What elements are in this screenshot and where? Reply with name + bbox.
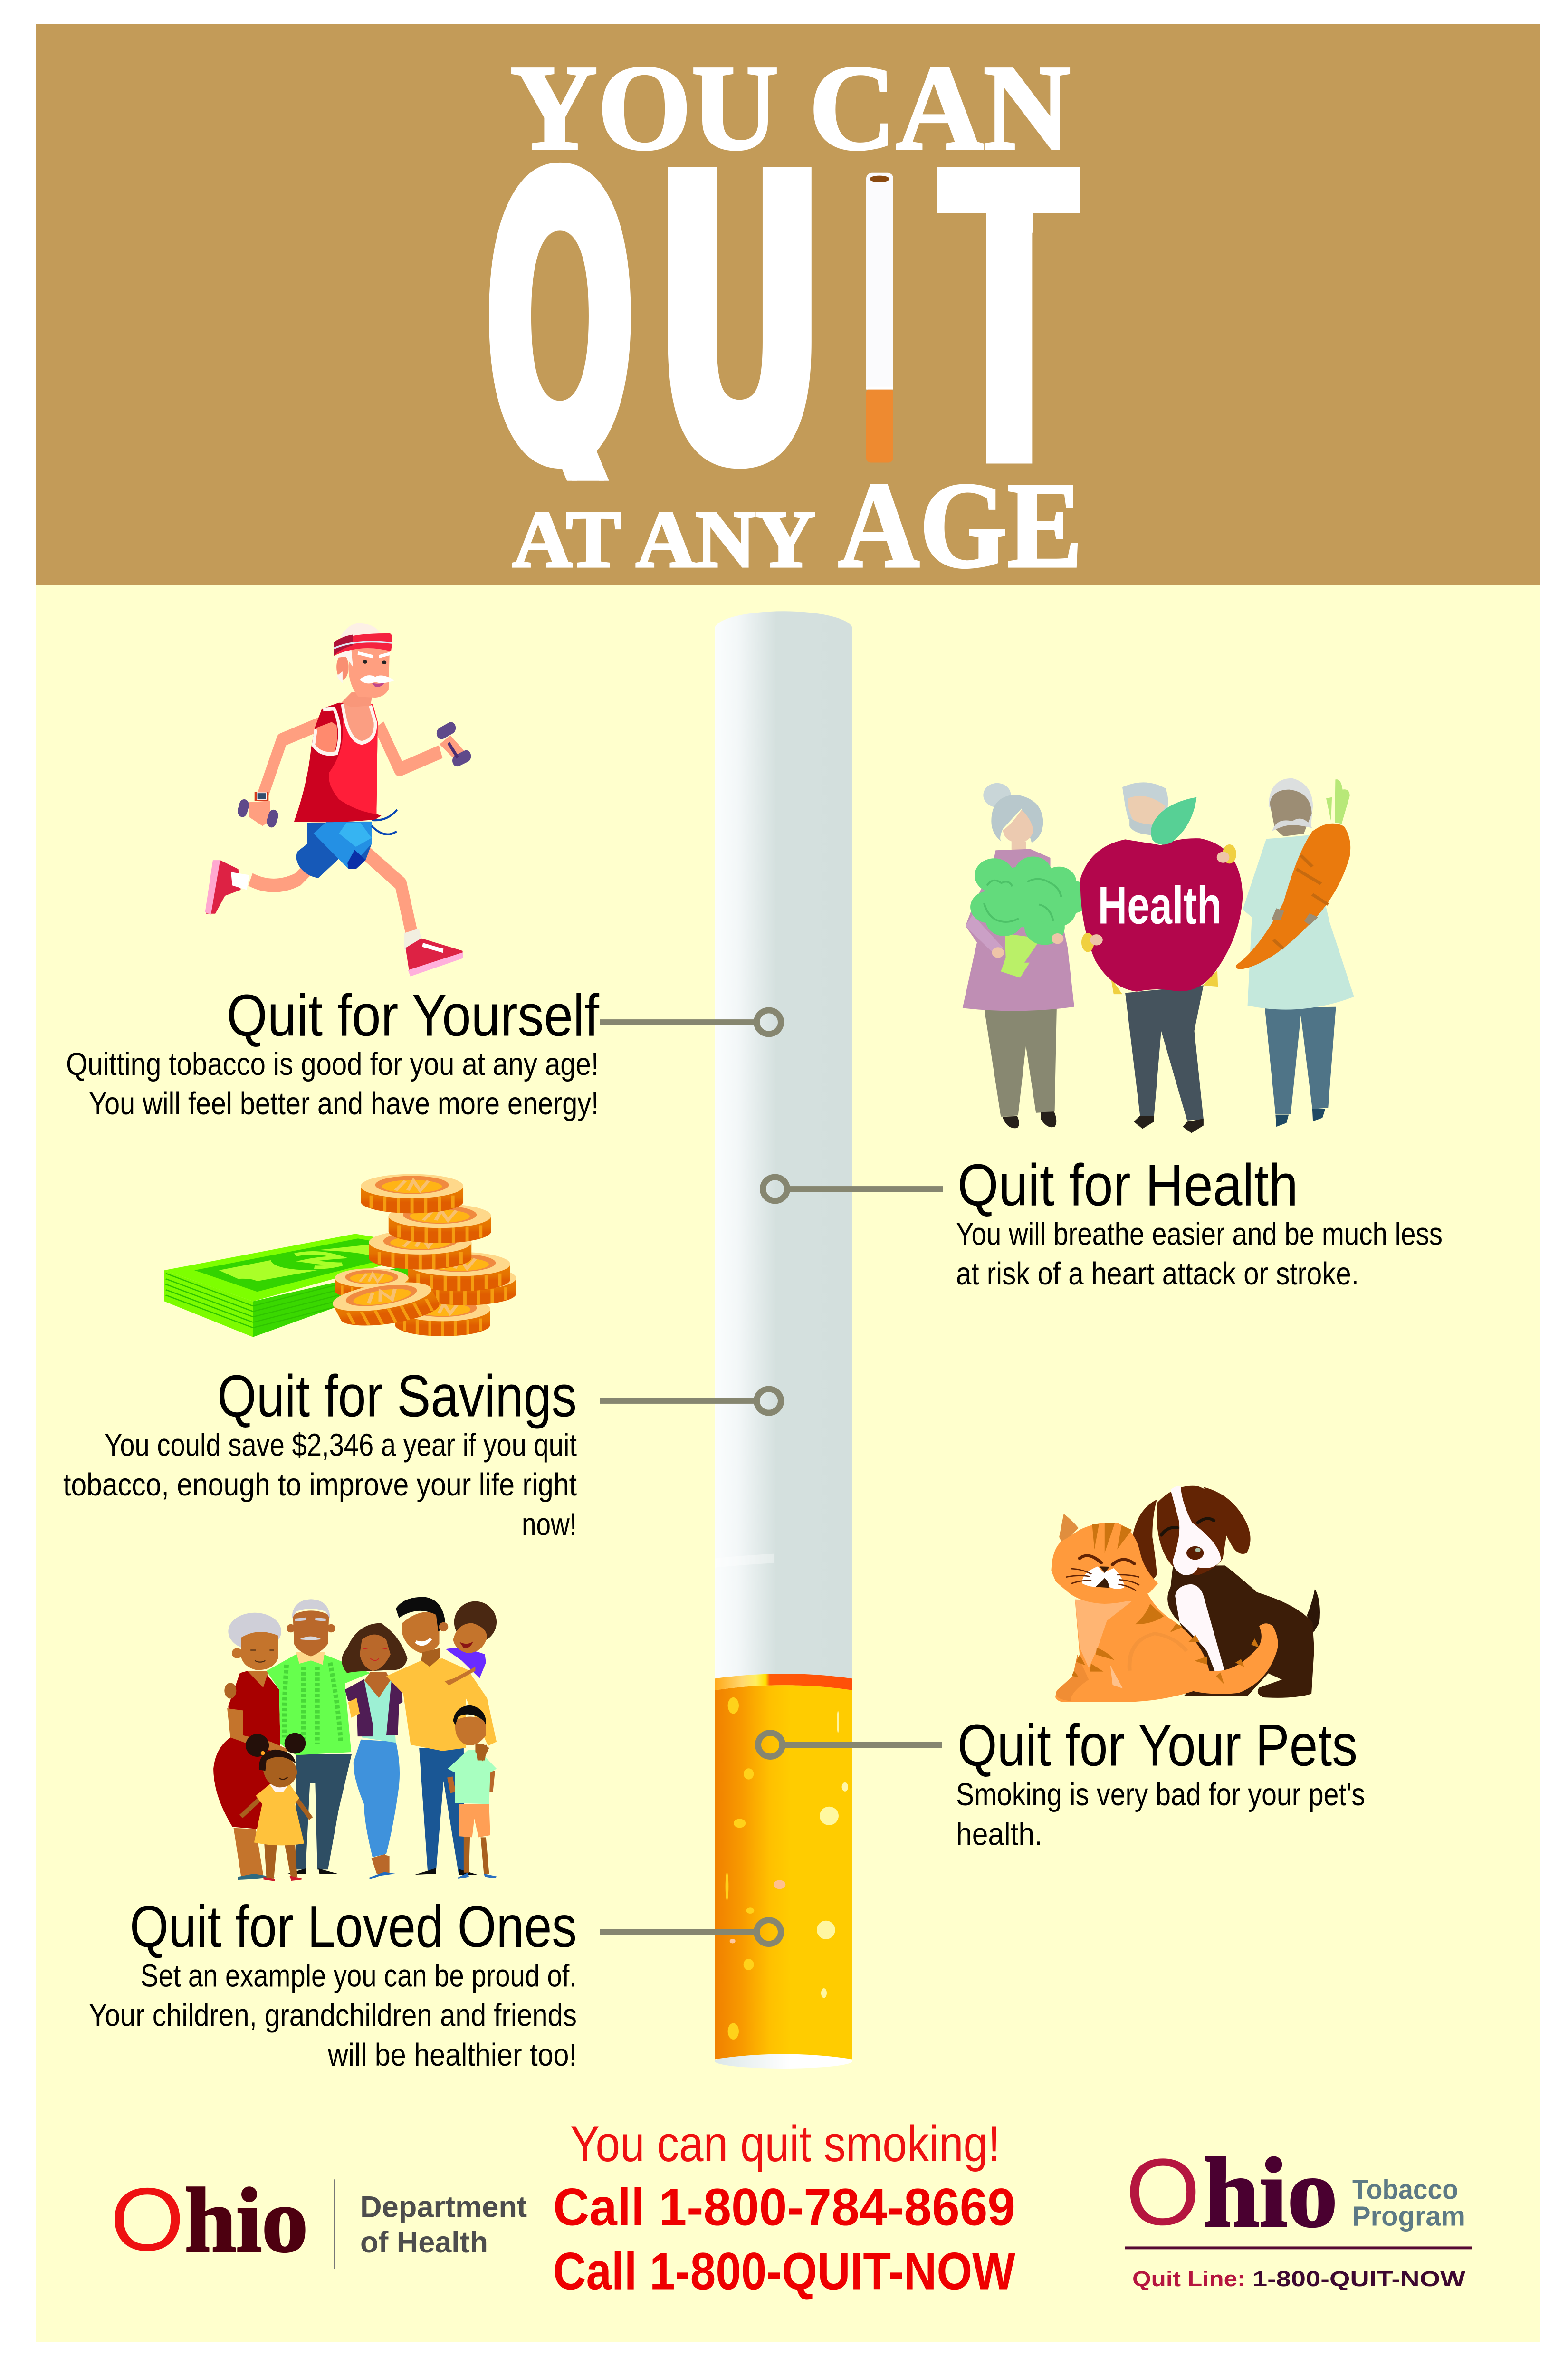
- cat: [1059, 1514, 1079, 1544]
- logo: Ohio Department of Health: O: [110, 2170, 184, 2270]
- logo: Ohio Department of Health: [110, 2170, 527, 2271]
- girl: [246, 1734, 269, 1757]
- text block: Quit for Savings: now!: [522, 1507, 577, 1542]
- text block: Quit for Savings: [63, 1363, 577, 1542]
- connector: Quit for Savings: [600, 1389, 781, 1413]
- text block: Quit for Loved Ones: [89, 1893, 577, 2073]
- giant cigarette timeline: [715, 611, 852, 2069]
- text block: Quit for Yourself: Quit for Yourself: [227, 982, 600, 1048]
- boy: [464, 1835, 489, 1874]
- man with carrot: [1265, 1007, 1336, 1114]
- text block: Quit for Savings: You could save $2,346 a year if you quit: [105, 1428, 577, 1463]
- text block: Quit for Yourself: Quitting tobacco is good for you at any age!: [66, 1046, 599, 1082]
- father: [419, 1748, 465, 1873]
- text block: Quit for Yourself: You will feel better and have more energy!: [89, 1086, 599, 1121]
- logo: Ohio Department of Health: Department: [360, 2191, 527, 2224]
- logo: Ohio Tobacco Program: Tobacco: [1352, 2174, 1458, 2205]
- mother: [372, 1854, 390, 1874]
- text block: Quit for Savings: Quit for Savings: [217, 1363, 577, 1429]
- title: AT ANY AGE: [512, 457, 1082, 594]
- text block: Quit for Loved Ones: will be healthier too!: [327, 2038, 577, 2073]
- icon: multi-generation family: [213, 1597, 497, 1880]
- logo: Ohio Tobacco Program: 1-800-QUIT-NOW: [1252, 2267, 1465, 2291]
- call to action: quit line numbers: Call 1-800-784-8669: [553, 2177, 1015, 2236]
- text block: Quit for Health: Quit for Health: [957, 1151, 1298, 1218]
- logo: Ohio Department of Health: hio: [185, 2170, 308, 2271]
- title: QUIT big letters with cigarette as the I: [484, 87, 1082, 560]
- text block: Quit for Health: at risk of a heart attack or stroke.: [956, 1256, 1359, 1292]
- call to action: quit line numbers: [553, 2115, 1015, 2300]
- logo: Ohio Tobacco Program: Quit Line:: [1132, 2267, 1245, 2291]
- text block: Quit for Health: You will breathe easier and be much less: [956, 1217, 1443, 1252]
- text block: Quit for Savings: tobacco, enough to improve your life right: [63, 1467, 577, 1503]
- dog: [1307, 1589, 1320, 1632]
- toddler on shoulders: [446, 1648, 486, 1678]
- title: YOU CAN: YOU CAN: [510, 40, 1071, 175]
- text block: Quit for Loved Ones: Your children, grandchildren and friends: [89, 1998, 577, 2033]
- logo: Ohio Tobacco Program: hio: [1204, 2137, 1338, 2248]
- logo: Ohio Tobacco Program: O: [1126, 2139, 1200, 2245]
- connector: Quit for Loved Ones: [600, 1920, 781, 1944]
- title: QUIT big letters with cigarette as the I: U: [652, 95, 827, 547]
- text block: Quit for Your Pets: [956, 1712, 1365, 1852]
- title: QUIT big letters with cigarette as the I: T: [935, 87, 1082, 560]
- text block: Quit for Your Pets: health.: [956, 1817, 1042, 1852]
- title: AT ANY AGE: AGE: [838, 457, 1082, 594]
- connector: Quit for Health: [763, 1177, 943, 1201]
- text block: Quit for Your Pets: Smoking is very bad for your pet's: [956, 1777, 1365, 1812]
- text block: Quit for Health: [956, 1151, 1443, 1292]
- title: AT ANY AGE: AT ANY: [512, 495, 815, 584]
- grandfather: [296, 1754, 352, 1869]
- woman: [983, 783, 1011, 807]
- logo: Ohio Department of Health: of Health: [360, 2226, 488, 2259]
- icon: cat and dog: [1051, 1486, 1320, 1702]
- title: QUIT big letters with cigarette as the I: Q: [484, 99, 636, 546]
- text block: Quit for Loved Ones: Quit for Loved Ones: [130, 1893, 577, 1960]
- icon: seniors holding broccoli, apple and carrot: [963, 778, 1354, 1133]
- text block: Quit for Loved Ones: Set an example you can be proud of.: [141, 1958, 577, 1993]
- page background panel: [36, 585, 1540, 2342]
- man with apple: [1125, 986, 1204, 1121]
- logo: Ohio Tobacco Program: [1125, 2137, 1472, 2291]
- text block: Quit for Yourself: [66, 982, 600, 1121]
- call to action: quit line numbers: Call 1-800-QUIT-NOW: [553, 2242, 1015, 2300]
- connector: Quit for Yourself: [600, 1010, 781, 1034]
- label: Health on apple: Health: [1098, 876, 1222, 935]
- connector: Quit for Your Pets: [758, 1733, 942, 1757]
- grandmother: [234, 1828, 263, 1876]
- header banner: [36, 24, 1540, 585]
- call to action: quit line numbers: You can quit smoking!: [570, 2115, 1000, 2172]
- icon: stack of cash and gold coins: [164, 1174, 516, 1337]
- text block: Quit for Your Pets: Quit for Your Pets: [957, 1712, 1358, 1778]
- logo: Ohio Tobacco Program: Program: [1352, 2200, 1465, 2232]
- icon: old man running with dumbbells: [205, 623, 466, 977]
